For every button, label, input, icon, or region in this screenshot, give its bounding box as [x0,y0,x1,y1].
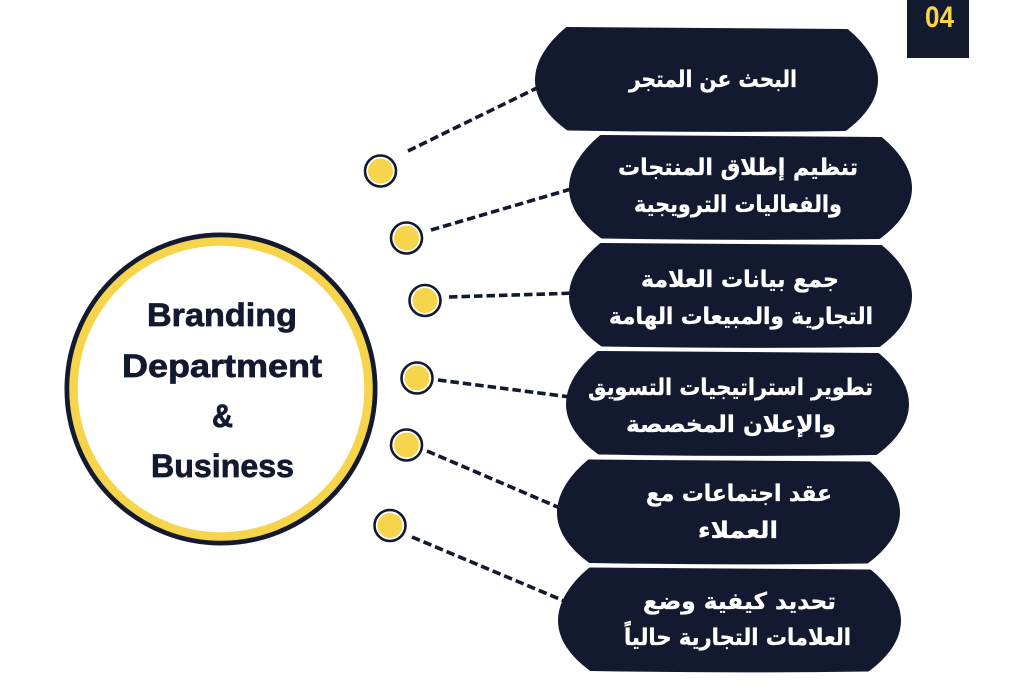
pill 3: brand data and sales: التجارية والمبيعات الهامة [609,304,873,330]
node dot 3 [410,285,440,316]
pill 6: current brand positioning [560,570,899,670]
central circle: Branding Department & Business [67,235,375,543]
pill 4: marketing and advertising strategies: تطوير استراتيجيات التسويق [588,375,873,401]
pill 2: product launches and promotions: والفعاليات الترويجية [634,192,842,218]
pill 2: product launches and promotions [571,137,910,238]
central circle: Branding Department & Business: Branding [147,297,297,333]
node dot 2 [391,222,422,254]
central circle: Branding Department & Business: Business [151,448,294,484]
connector 1 [408,84,545,151]
pill 3: brand data and sales [571,245,910,346]
node dot 6 [374,510,406,541]
page number badge: 04 [925,1,954,34]
connector 6 [412,537,569,603]
page number badge [907,0,969,58]
pill 4: marketing and advertising strategies [568,353,907,454]
pill 2: product launches and promotions: تنظيم إطلاق المنتجات [618,155,858,181]
pill 3: brand data and sales: جمع بيانات العلامة [641,267,839,293]
node dot 4 [402,362,432,394]
connector 3 [449,293,578,297]
pill 6: current brand positioning: تحديد كيفية وضع [643,589,836,615]
node dot 5 [391,430,422,460]
connector 2 [431,187,578,230]
pill 5: client meetings [559,462,898,562]
node dot 1 [365,156,396,186]
pill 5: client meetings: عقد اجتماعات مع [646,481,832,507]
pill 5: client meetings: العملاء [698,518,778,544]
pill 4: marketing and advertising strategies: والإعلان المخصصة [626,412,836,438]
pill 1: store search [537,29,876,130]
central circle: Branding Department & Business: & [212,398,233,434]
connector 4 [438,380,578,398]
central circle: Branding Department & Business: Department [122,348,322,384]
pill 1: store search: البحث عن المتجر [628,67,797,93]
connector 5 [427,451,567,511]
pill 6: current brand positioning: العلامات التجارية حالياً [624,621,851,651]
